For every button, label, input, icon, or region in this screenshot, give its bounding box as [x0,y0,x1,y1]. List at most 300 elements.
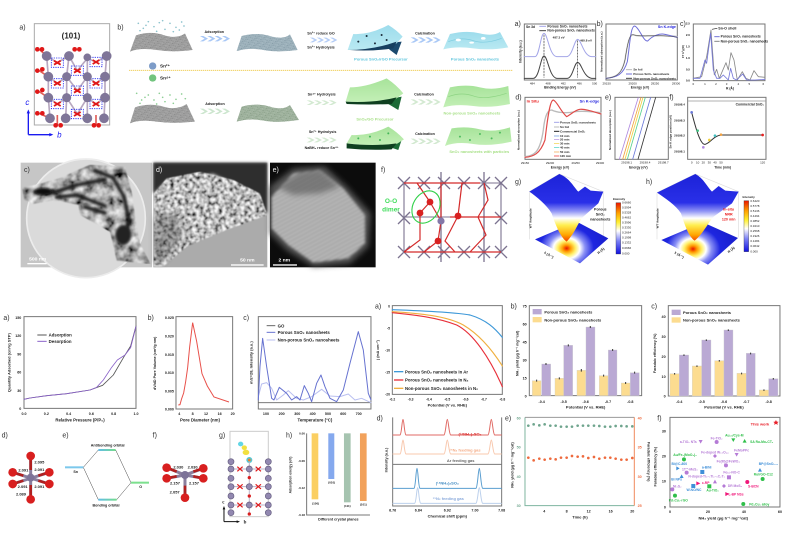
axes text: 40 [713,161,717,165]
annotations: 1 [704,82,706,86]
axes text: 0.4 [66,412,72,416]
annotations: 2 [715,82,717,86]
axes text: 40 [662,315,666,319]
marker labels: Fe₍₁₎-NO-C [723,470,740,474]
bars non-porous [670,361,769,396]
label: e) [62,433,69,440]
axes text: NH₃ yield (µg h⁻¹ mg⁻¹cat) [510,441,514,488]
legend: Non-porous SnO₂ nanosheets [544,317,602,322]
label: c) [243,315,249,322]
cell frame [230,431,268,517]
color bar [613,197,631,255]
label: c) [651,304,657,311]
base contour [535,222,608,263]
axis arrows c b: b [57,130,62,139]
bar labels: (100) [312,501,319,505]
marker labels: Au₂₅/Cys-M [725,434,744,438]
sample annotation: Porous [594,208,607,212]
axes text: -0.5 [698,400,705,404]
orbital labels: O [139,485,142,489]
axes text: -15 [385,370,390,374]
axes text: 6.76 [389,509,396,513]
axes text: 400 [310,412,316,416]
color bar: 0.1284 [750,239,760,243]
texts: 29150 [602,81,611,85]
color bar [743,195,760,253]
sample annotation: NRR [725,213,733,217]
axes text: Sn-K edge position (eV) [669,115,673,148]
sheet with particles [445,127,512,154]
axes text: -0.18 [298,513,305,517]
trace labels: (¹⁴NH₄)₂SO₄ [458,431,482,436]
central Sn [27,474,35,482]
trace labels: (¹⁴NH₄)₂SO₄ [436,480,459,485]
axes text: Different crystal planes [318,518,359,522]
color bar: 0.0666 [622,246,631,250]
bond lengths: 2.091 [18,484,28,489]
axes text: 7.08 [498,509,505,513]
sheet with adsorbed ions [237,34,298,51]
legend: In Situ [527,99,539,104]
orbital labels: Bonding orbital [92,504,119,508]
axis labels: R (Å) [726,245,736,254]
blue precursor: Porous SnO₂/rGO Precursor [354,56,408,61]
label: a) [3,315,10,322]
orbital labels: Sn [73,470,78,474]
bar labels: (111) [344,504,351,508]
axes text: 4 [178,412,181,416]
plot frame [524,24,596,80]
legend: 29250 [572,161,580,165]
blue precursor [348,25,408,61]
bond lengths [170,464,200,494]
bond lengths: 2.030 [188,464,198,469]
legend [394,369,478,391]
axes text: Potential (V vs. RHE) [704,404,744,409]
axes text: Quantity Adsorbed (cm³/g STP) [7,333,12,392]
axes text: 7.00 [471,509,479,513]
marker labels: Fe-doped W₁₈O₄₉ [701,450,729,454]
hydrolysis arrow [307,93,337,105]
data points [690,111,764,149]
legend: Sn K-edge [580,99,600,104]
axes text: -0.6 [582,400,589,404]
axes text: 500 [592,81,597,85]
color bar: 0.000 [750,249,758,253]
axes text: 700 [356,412,362,416]
legend [267,323,340,343]
legend and annotations: 495.8 eV [580,39,592,43]
legend: Sn foil [560,125,569,129]
axes text: -0.4 [426,397,432,401]
yield points [527,423,634,428]
bond lengths: 2.091 [34,484,45,489]
plot frame [258,317,371,409]
arrow calcination top: Calcination [415,31,435,35]
texts: Sn foil [633,68,643,72]
plot frame [392,306,502,394]
annotations: 1.0 [686,56,690,60]
axis arrows: c [222,500,225,505]
axes text: -0.12 [298,486,305,490]
annotations: 5 [748,82,750,86]
arrow calcination middle [411,92,441,105]
axes text: 29198.1 [621,161,632,165]
axes text: 8 [192,412,194,416]
axes text: 50 [719,161,723,165]
image c TEM: c) [24,167,30,174]
label: f) [669,94,674,101]
image c TEM: 500 nm [29,256,47,262]
bonds [13,456,49,499]
panel: synthesis scheme [117,20,513,154]
label: d) [2,433,8,440]
legend and annotations: Non-porous SnO₂ nanosheets [547,29,595,33]
base contour [661,222,738,265]
annotation O-O dimer: dimer [382,206,400,214]
axes text: -5 [387,326,390,330]
axes text: m/z=28, Intensity (a.u.) [249,341,254,384]
axes text: 0.8 [111,412,116,416]
axes text: 40 [742,510,746,514]
trace labels [433,431,482,501]
color bar: 0.0642 [750,244,760,248]
panel: crystal structure (101) [19,24,111,139]
trace labels: ¹⁵N₂ feeding gas [449,448,481,453]
atoms [162,463,208,502]
plot frame [693,24,765,81]
reaction labels top: Sn²⁺ reduce GO [307,32,335,36]
axes text [518,40,597,89]
annotations: 6 [762,82,764,86]
reaction labels top: Sn²⁺ Hydrolysis [307,45,335,49]
axis labels: k (Å⁻¹) [543,250,555,259]
axes text: 488 [546,81,551,85]
color bar: 0.4662 [622,216,631,220]
axes text: 300 [294,412,300,416]
arrow calcination top [411,31,441,43]
annotations: Non-porous SnO₂ nanosheets [721,39,768,43]
axis labels: WT Amplitude [528,208,532,228]
axes text: 20 [702,161,705,165]
sheet with particles: SnO₂ nanosheets with particles [449,149,510,154]
legend and annotations: Sn 3d [526,25,535,29]
axes [307,433,370,515]
image e STEM: 2 nm [278,258,291,264]
marker labels: Fe-TiO₂ [711,436,723,440]
label: f) [153,433,157,440]
axes text [669,102,765,169]
legend: Non-porous SnO₂ nanosheets [683,318,741,323]
image d TEM: d) [156,167,162,174]
annotations: 2.0 [686,33,690,37]
axes text: 0 [19,407,21,411]
panel: wavelet transform h [646,174,760,265]
pore curve [178,323,229,405]
color bar: 0.4494 [750,214,760,218]
axes text: 6.84 [415,509,423,513]
EXAFS curves [693,30,765,80]
bars porous [542,327,639,396]
axes text [376,304,505,408]
annotations: 4 [737,82,739,86]
XANES curves [606,26,677,78]
arrow adsorption top: Adsorption [205,30,224,34]
porous SnO2 nanosheets: Porous SnO₂ nanosheets [451,56,500,61]
TPD curves [258,332,371,403]
marker labels: Ru/rGO-C12 [754,472,773,476]
axis arrows: b [244,520,247,525]
axes text [608,110,669,169]
panel: Faradaic efficiency bars c [651,304,780,409]
bond lengths: 2.095 [34,459,45,464]
label: g) [219,433,225,440]
axes text: -0.06 [298,459,305,463]
plot frame [176,317,233,409]
image e STEM [270,163,376,267]
panel: edge position f [669,94,766,169]
axes text: 0 [691,161,693,165]
panel: O-O dimer structure f [381,167,507,262]
orbital labels [73,444,142,508]
non porous sheet: Non-porous SnO₂ nanosheets [444,110,501,115]
axes text: -0.7 [743,400,749,404]
orbital labels: Antibonding orbital [91,444,125,448]
axes text: 30 [638,475,642,479]
color bar: 0.000 [622,251,630,255]
connectors [83,450,131,500]
axes text: 150 [15,316,21,320]
axes text: 29198.1 [674,149,685,153]
axes text: 0.0 [21,412,27,416]
texts: Normalized absorption (a.u.) [600,32,604,72]
marker labels [669,422,779,506]
axes text [7,316,139,423]
label a: a) [19,24,26,31]
color bar: 0.3330 [622,226,631,230]
axes text: 120 [760,161,765,165]
plot frame [529,306,642,396]
arrow calcination lower: Calcination [415,132,435,136]
axes text: 30 [662,429,666,433]
label: b) [148,315,154,322]
axes text: Pore Diameter (nm) [180,418,220,423]
bond lengths: 2.157 [189,480,200,485]
label: h) [646,179,652,186]
3D surface [657,174,739,241]
axes text: 20 [630,510,634,514]
axes text: 10 [662,375,666,379]
legend [533,309,602,322]
charge density lobes [238,442,252,463]
axes text: 29198.7 [658,161,669,165]
texts: Porous SnO₂ nanosheets [633,72,670,76]
marker labels: PL-BP NSs [726,493,744,497]
legend: 29150 [521,161,529,165]
color bar: Intensity [613,197,625,201]
axes text: 0.005 [165,390,174,394]
legend Sn ions [149,62,171,82]
axes text: 10 [696,161,700,165]
legend and annotations: 487.3 eV [553,35,565,39]
legend: Porous SnO₂ nanosheets [560,120,596,124]
annotations: 1.5 [686,45,690,49]
markers [670,420,779,506]
label: e) [505,416,511,423]
legend and annotations: Porous SnO₂ nanosheets [547,24,588,28]
label: a) [375,304,381,311]
plot frame [688,97,766,159]
legend: Porous SnO₂ nanosheets in Ar [405,369,468,374]
color bar: 0.1926 [750,234,760,238]
legend: Desorption [49,339,72,344]
color bar: Intensity [743,195,755,199]
non porous sheet [443,86,510,115]
axes text: 90 [17,352,21,356]
annotations: R (Å) [726,85,734,90]
image c TEM [21,159,152,278]
axes text: 16 [218,412,222,416]
color bar: 0.3996 [622,221,631,225]
axes text: 496 [577,81,582,85]
plot frame [24,317,136,408]
plot frame left and right axes [525,417,634,506]
isotherm curves [24,326,136,399]
panel: pore size distribution b [148,315,235,423]
bars non-porous [532,370,630,396]
marker labels: a-TiO₂ NTs [680,440,697,444]
axes text: -0.7 [605,400,611,404]
axes text: 30 [523,358,527,362]
legend: 40 min [560,146,570,150]
legend: GO [278,323,285,328]
panel: N2 adsorption isotherm a [3,315,139,423]
axes text: -0.7 [481,397,487,401]
legend: 20 min [560,138,570,142]
porous SnO2 nanosheets [443,32,508,61]
top route: GO with Sn2+ ions [130,20,193,52]
axes text [516,304,633,409]
bottom route: GO with Sn4+ ions [130,92,195,123]
axes text: 20 [662,355,666,359]
axis arrows c b [25,98,62,139]
axes text: 0 [388,304,390,308]
axes text: Faradaic efficiency (%) [653,333,657,373]
color bar: 0.5994 [622,206,631,210]
legend: Porous SnO₂ nanosheets [683,310,732,315]
bars porous [679,330,778,396]
marker labels: 1T'''-MoS₂ [682,467,698,471]
annotations [681,22,768,90]
label: f) [381,167,385,174]
axes text [385,447,505,518]
panel: LSV a [375,304,505,408]
panel: adsorption energy h [286,431,370,522]
oxygen atoms [248,476,251,516]
axes text: -0.6 [721,400,727,404]
axes text: 30 [708,161,711,165]
color bar: 0.6420 [750,199,760,203]
axes text: -10 [385,348,390,352]
green precursor [346,78,403,121]
axes text: 10 [662,480,666,484]
axes text: -0.4 [538,400,546,404]
legend: 30 min [560,142,570,146]
axes text: 40 [638,417,642,421]
NMR traces [393,419,502,503]
divider dotted line [129,69,513,72]
sample annotation: nanosheets [590,218,610,222]
central Sn [181,471,189,479]
arrow adsorption top [200,30,230,41]
arrow adsorption bottom [200,102,230,114]
hydrolysis reduce arrow [305,130,339,150]
axes text: 120 [15,334,21,338]
axes text: 60 [778,510,782,514]
panel: structure f [153,433,208,502]
marker labels: W-NO/NC [687,488,702,492]
legend: Porous SnO₂ nanosheets [544,309,593,314]
legend [37,333,72,344]
commercial reference line: Commercial SnO₂ [736,102,764,106]
axes text: 29198.3 [674,118,685,122]
axes text: 60 [17,371,21,375]
frame [34,24,110,125]
axes text: 25 [638,504,642,508]
atoms [417,199,461,244]
axis labels: k (Å⁻¹) [674,250,685,259]
panel: literature comparison f [654,416,782,520]
axes text: NH₃ yield (µg h⁻¹ mg⁻¹cat) [699,515,749,520]
axes text: 30 [517,504,521,508]
axes text: j (mA cm⁻²) [376,339,380,361]
label: b) [597,21,603,28]
edge lines [619,97,656,159]
annotations: 2.5 [686,22,690,26]
slab atoms [228,459,271,516]
axes text: 492 [561,81,566,85]
axes text: -0.8 [499,397,505,401]
axes text: Relative Pressure (P/P₀) [55,418,105,423]
axes text [654,429,782,520]
marker labels: a-BiNi [702,465,712,469]
axes text: Time (h) [572,514,588,519]
axis labels: R (Å) [596,246,605,255]
green precursor: SnO₂/GO Precursor [356,116,394,121]
axes text: Potential (V vs. RHE) [566,404,606,409]
panel: top right XANES b [597,21,680,89]
axes text: -0.6 [463,397,469,401]
back walls grid [657,174,739,239]
trace labels: ¹⁵N₂ feeding gas [433,496,465,501]
axes text: 0.025 [165,316,174,320]
legend: Non-porous SnO₂ nanosheets in N₂ [405,386,478,391]
plot frame [615,97,668,159]
marker labels: Fe(III)@FeWO₄ [717,459,740,463]
axes text: Adsorption energy (eV) [289,457,293,493]
axes text: 600 [340,412,346,416]
axes text: 20 [706,510,710,514]
legend [672,310,741,323]
axes text: -0.5 [444,397,450,401]
axes text: 0 [664,395,666,399]
marker labels: S-BCN [748,484,759,488]
back walls grid [529,174,603,239]
marker labels: N-doped-Ti₃₋ₓTi₂₋ₓC₂Tₓ [688,475,726,479]
bond lengths: 2.030 [173,464,184,469]
panel: TPD MS c [243,315,371,423]
axes text: Normalized absorption (a.u.) [608,110,612,150]
